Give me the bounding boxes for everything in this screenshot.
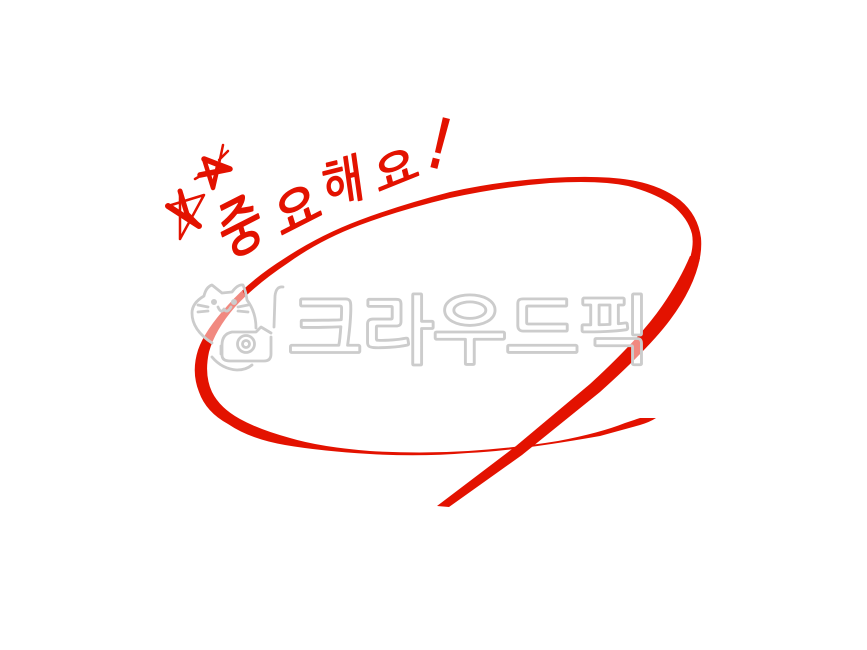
handwritten heading	[211, 100, 459, 270]
red hand-drawn circle with crossing tail	[195, 177, 701, 507]
handwritten heading: !	[422, 100, 459, 186]
handwritten heading: 해	[319, 149, 367, 216]
watermark wordmark: 크라우드픽	[289, 289, 651, 373]
handwritten heading: 중	[211, 185, 271, 270]
icon: hand-drawn star upper	[195, 145, 230, 188]
handwritten heading: 요	[268, 173, 327, 249]
watermark: cat with camera icon	[192, 285, 283, 370]
handwritten heading: 요	[369, 139, 423, 204]
icon: hand-drawn star lower	[168, 191, 204, 239]
